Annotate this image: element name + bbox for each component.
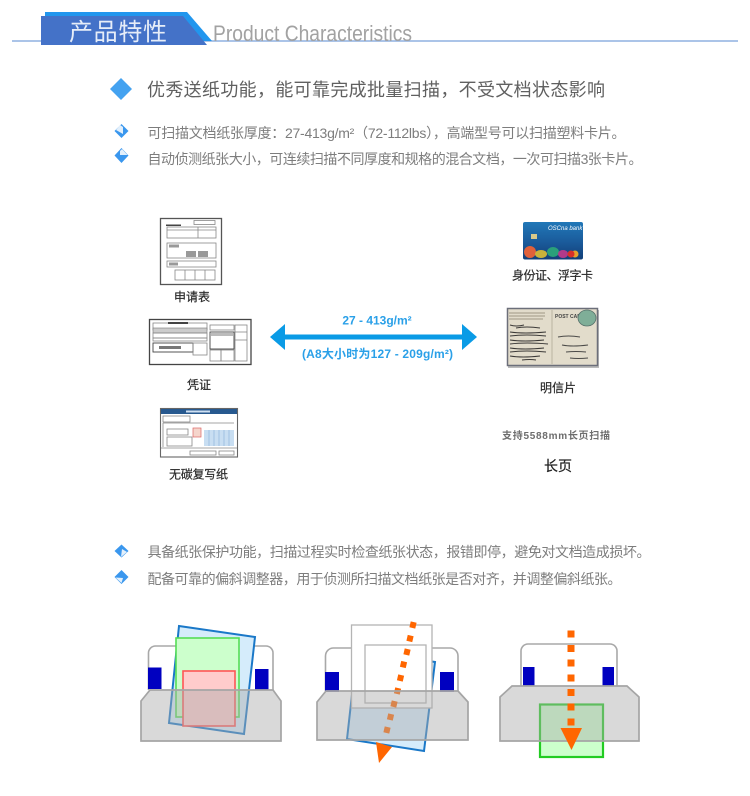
label: long page: 长页 — [544, 458, 572, 474]
icon: postcard — [508, 308, 599, 368]
section title english: Product Characteristics — [213, 21, 412, 46]
bullet text 4: 配备可靠的偏斜调整器，用于侦测所扫描文档纸张是否对齐，并调整偏斜纸张。 — [148, 571, 622, 587]
bullet icon 4 — [114, 570, 128, 584]
icon: voucher — [150, 320, 251, 364]
header banner — [12, 12, 738, 46]
weight range label: 27 - 413g/m² — [342, 314, 412, 328]
icon: plastic card: OSCna bank — [548, 226, 583, 232]
label: voucher: 凭证 — [187, 377, 211, 392]
scanner 1: mixed paper sizes — [141, 626, 281, 741]
bullet text 3: 具备纸张保护功能，扫描过程实时检查纸张状态，报错即停，避免对文档造成损坏。 — [148, 544, 650, 560]
bullet icon 2 — [114, 148, 128, 163]
scanner 2: skewed paper — [317, 621, 468, 763]
section title chinese: 产品特性 — [69, 19, 167, 46]
label: carbonless paper: 无碳复写纸 — [169, 468, 228, 482]
main heading: 优秀送纸功能，能可靠完成批量扫描，不受文档状态影响 — [147, 80, 605, 100]
A8 weight range label: (A8大小时为127 - 209g/m²) — [302, 346, 453, 361]
scanner 3: aligned paper — [500, 630, 639, 757]
icon: application form — [160, 218, 222, 284]
bullet icon 1 — [114, 124, 128, 138]
label: card: 身份证、浮字卡 — [512, 268, 593, 282]
icon: postcard: POST CARD — [555, 314, 585, 320]
bullet text 2: 自动侦测纸张大小，可连续扫描不同厚度和规格的混合文档，一次可扫描3张卡片。 — [148, 151, 642, 167]
heading diamond icon — [110, 78, 132, 100]
double arrow — [270, 324, 477, 350]
long page support note: 支持5588mm长页扫描 — [502, 429, 610, 442]
bullet icon 3 — [114, 544, 128, 558]
icon: plastic card — [523, 222, 583, 260]
bullet text 1: 可扫描文档纸张厚度：27-413g/m²（72-112lbs），高端型号可以扫描塑料卡片。 — [148, 125, 626, 141]
icon: carbonless paper — [160, 408, 238, 457]
label: postcard: 明信片 — [540, 381, 576, 395]
label: application form: 申请表 — [174, 290, 210, 304]
